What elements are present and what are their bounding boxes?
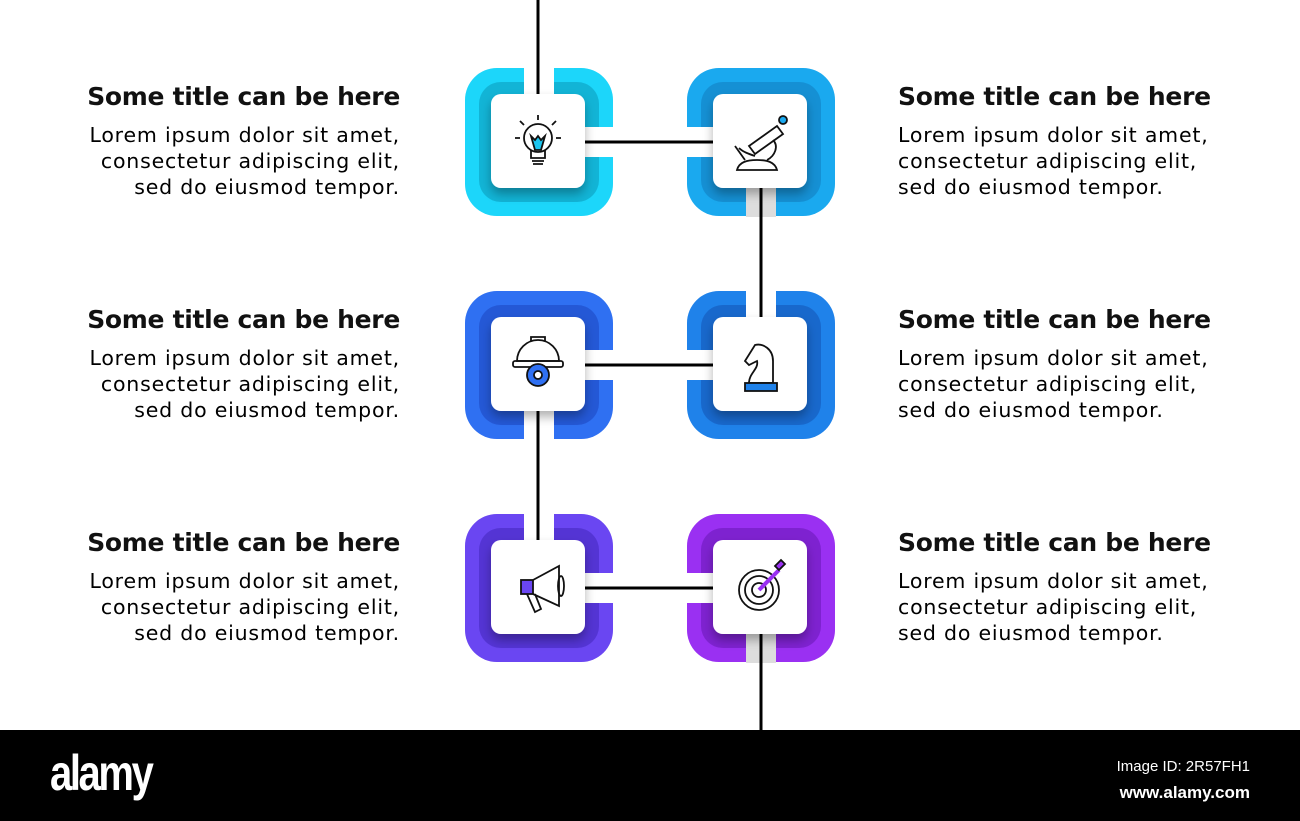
box 2 [686,68,835,217]
text: left 2: consectetur adipiscing elit, [101,372,400,396]
text: right 1: Lorem ipsum dolor sit amet, [898,123,1209,147]
text: right 1 [898,82,1211,199]
text: right 1: consectetur adipiscing elit, [898,149,1197,173]
text: right 3 [898,528,1211,645]
text: right 2: Lorem ipsum dolor sit amet, [898,346,1209,370]
box 6 [686,514,835,663]
text: left 3 [87,528,400,645]
text: left 1 [87,82,400,199]
icon: megaphone [521,566,564,612]
text: left 2 [87,305,400,422]
icon: microscope [735,116,787,170]
icon: helmet gear [513,337,563,386]
logo: alamy [50,745,151,801]
icon: chess knight [745,345,777,391]
text: left 2: Lorem ipsum dolor sit amet, [89,346,400,370]
text: right 2: sed do eiusmod tempor. [898,398,1164,422]
image id: Image ID: 2R57FH1 [1117,758,1250,775]
text: left 1: Some title can be here [87,82,400,111]
icon: light bulb [515,115,561,164]
text: left 2: sed do eiusmod tempor. [134,398,400,422]
text: left 3: Some title can be here [87,528,400,557]
image id [1117,758,1250,802]
footer [0,730,1300,821]
box 3 [465,291,614,440]
text: right 1: Some title can be here [898,82,1211,111]
text: left 3: sed do eiusmod tempor. [134,621,400,645]
text: right 2 [898,305,1211,422]
text: right 2: Some title can be here [898,305,1211,334]
icon: target [739,560,785,610]
text: left 1: sed do eiusmod tempor. [134,175,400,199]
box 4 [686,290,835,439]
text: left 1: Lorem ipsum dolor sit amet, [89,123,400,147]
text: right 3: Lorem ipsum dolor sit amet, [898,569,1209,593]
text: right 3: sed do eiusmod tempor. [898,621,1164,645]
connector lines [538,0,761,730]
text: left 2: Some title can be here [87,305,400,334]
image id: www.alamy.com [1120,783,1250,802]
box 1 [465,67,614,216]
text: right 3: Some title can be here [898,528,1211,557]
text: right 3: consectetur adipiscing elit, [898,595,1197,619]
box 5 [465,513,614,662]
text: right 1: sed do eiusmod tempor. [898,175,1164,199]
text: left 3: consectetur adipiscing elit, [101,595,400,619]
text: right 2: consectetur adipiscing elit, [898,372,1197,396]
text: left 1: consectetur adipiscing elit, [101,149,400,173]
text: left 3: Lorem ipsum dolor sit amet, [89,569,400,593]
